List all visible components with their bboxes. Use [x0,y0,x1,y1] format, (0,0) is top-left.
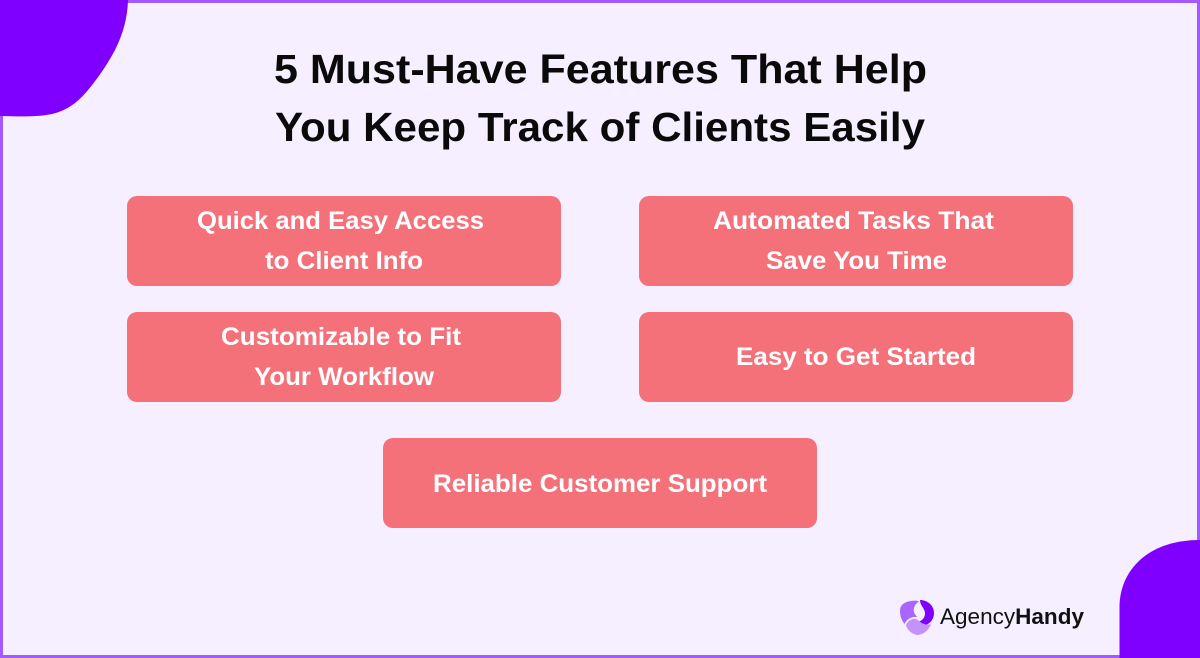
card: automated tasks: Save You Time [766,247,947,275]
card: reliable customer support: Reliable Customer Support [433,470,768,498]
title [274,46,927,150]
card: easy to get started [639,312,1073,402]
wordmark: AgencyHandy [940,604,1084,629]
card: quick and easy access [127,196,561,286]
card: automated tasks: Automated Tasks That [713,207,995,235]
card: easy to get started: Easy to Get Started [736,343,976,371]
card: automated tasks [639,196,1073,286]
card: customizable: Customizable to Fit [221,323,462,351]
card: quick and easy access: Quick and Easy Access [197,207,484,235]
logo: AgencyHandy [900,600,1084,635]
card: quick and easy access: to Client Info [265,247,423,275]
decorative blob: bottom right [1120,540,1200,658]
card: customizable: Your Workflow [254,363,435,391]
decorative blob: top left [0,0,128,116]
card: reliable customer support [383,438,817,528]
title: You Keep Track of Clients Easily [275,104,925,150]
card: customizable [127,312,561,402]
title: 5 Must-Have Features That Help [274,46,927,92]
icon: logo mark [900,600,934,635]
